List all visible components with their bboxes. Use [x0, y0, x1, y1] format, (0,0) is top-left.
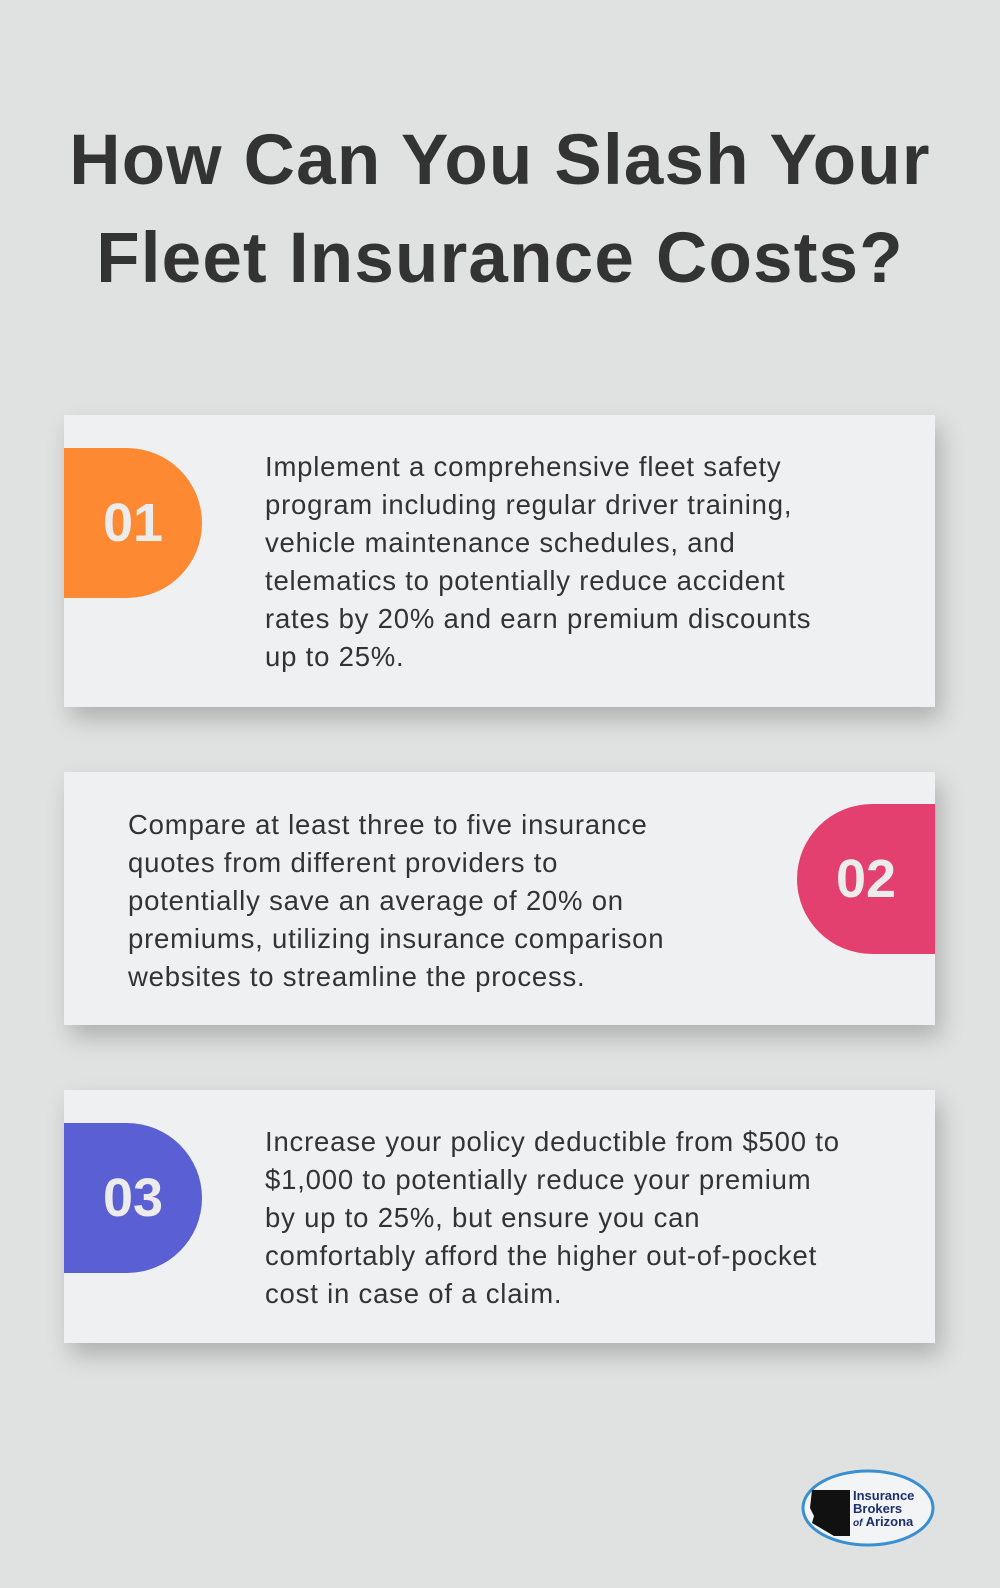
badge 01 — [64, 448, 202, 598]
text tip 1: rates by 20% and earn premium discounts — [265, 603, 811, 634]
badge 03 — [64, 1123, 202, 1273]
panel: tip 1 — [64, 415, 935, 707]
logo: Insurance — [853, 1488, 914, 1503]
logo — [802, 1470, 934, 1546]
title: Fleet Insurance Costs? — [96, 219, 904, 298]
text tip 3: cost in case of a claim. — [265, 1278, 562, 1309]
title: How Can You Slash Your — [69, 121, 931, 200]
text tip 1 — [265, 451, 811, 672]
badge 03: 03 — [103, 1168, 163, 1228]
text tip 1: telematics to potentially reduce accident — [265, 565, 785, 596]
logo: Brokers — [853, 1501, 902, 1516]
text tip 1: program including regular driver training, — [265, 489, 792, 520]
badge 02: 02 — [836, 849, 896, 909]
badge 02 — [797, 804, 935, 954]
panel: tip 2 — [64, 772, 935, 1025]
panel: tip 3 — [64, 1090, 935, 1343]
logo: of Arizona — [853, 1514, 914, 1529]
text tip 3: by up to 25%, but ensure you can — [265, 1202, 700, 1233]
text tip 3: $1,000 to potentially reduce your premium — [265, 1164, 811, 1195]
badge 01: 01 — [103, 493, 163, 553]
text tip 2: websites to streamline the process. — [128, 961, 586, 992]
title — [69, 121, 931, 298]
text tip 1: Implement a comprehensive fleet safety — [265, 451, 781, 482]
text tip 2: potentially save an average of 20% on — [128, 885, 624, 916]
text tip 2: Compare at least three to five insurance — [128, 809, 648, 840]
text tip 2 — [128, 809, 664, 992]
text tip 2: premiums, utilizing insurance comparison — [128, 923, 664, 954]
text tip 1: up to 25%. — [265, 641, 404, 672]
text tip 3: comfortably afford the higher out-of-pocket — [265, 1240, 817, 1271]
text tip 2: quotes from different providers to — [128, 847, 558, 878]
text tip 1: vehicle maintenance schedules, and — [265, 527, 736, 558]
text tip 3: Increase your policy deductible from $500 to — [265, 1126, 840, 1157]
text tip 3 — [265, 1126, 840, 1309]
